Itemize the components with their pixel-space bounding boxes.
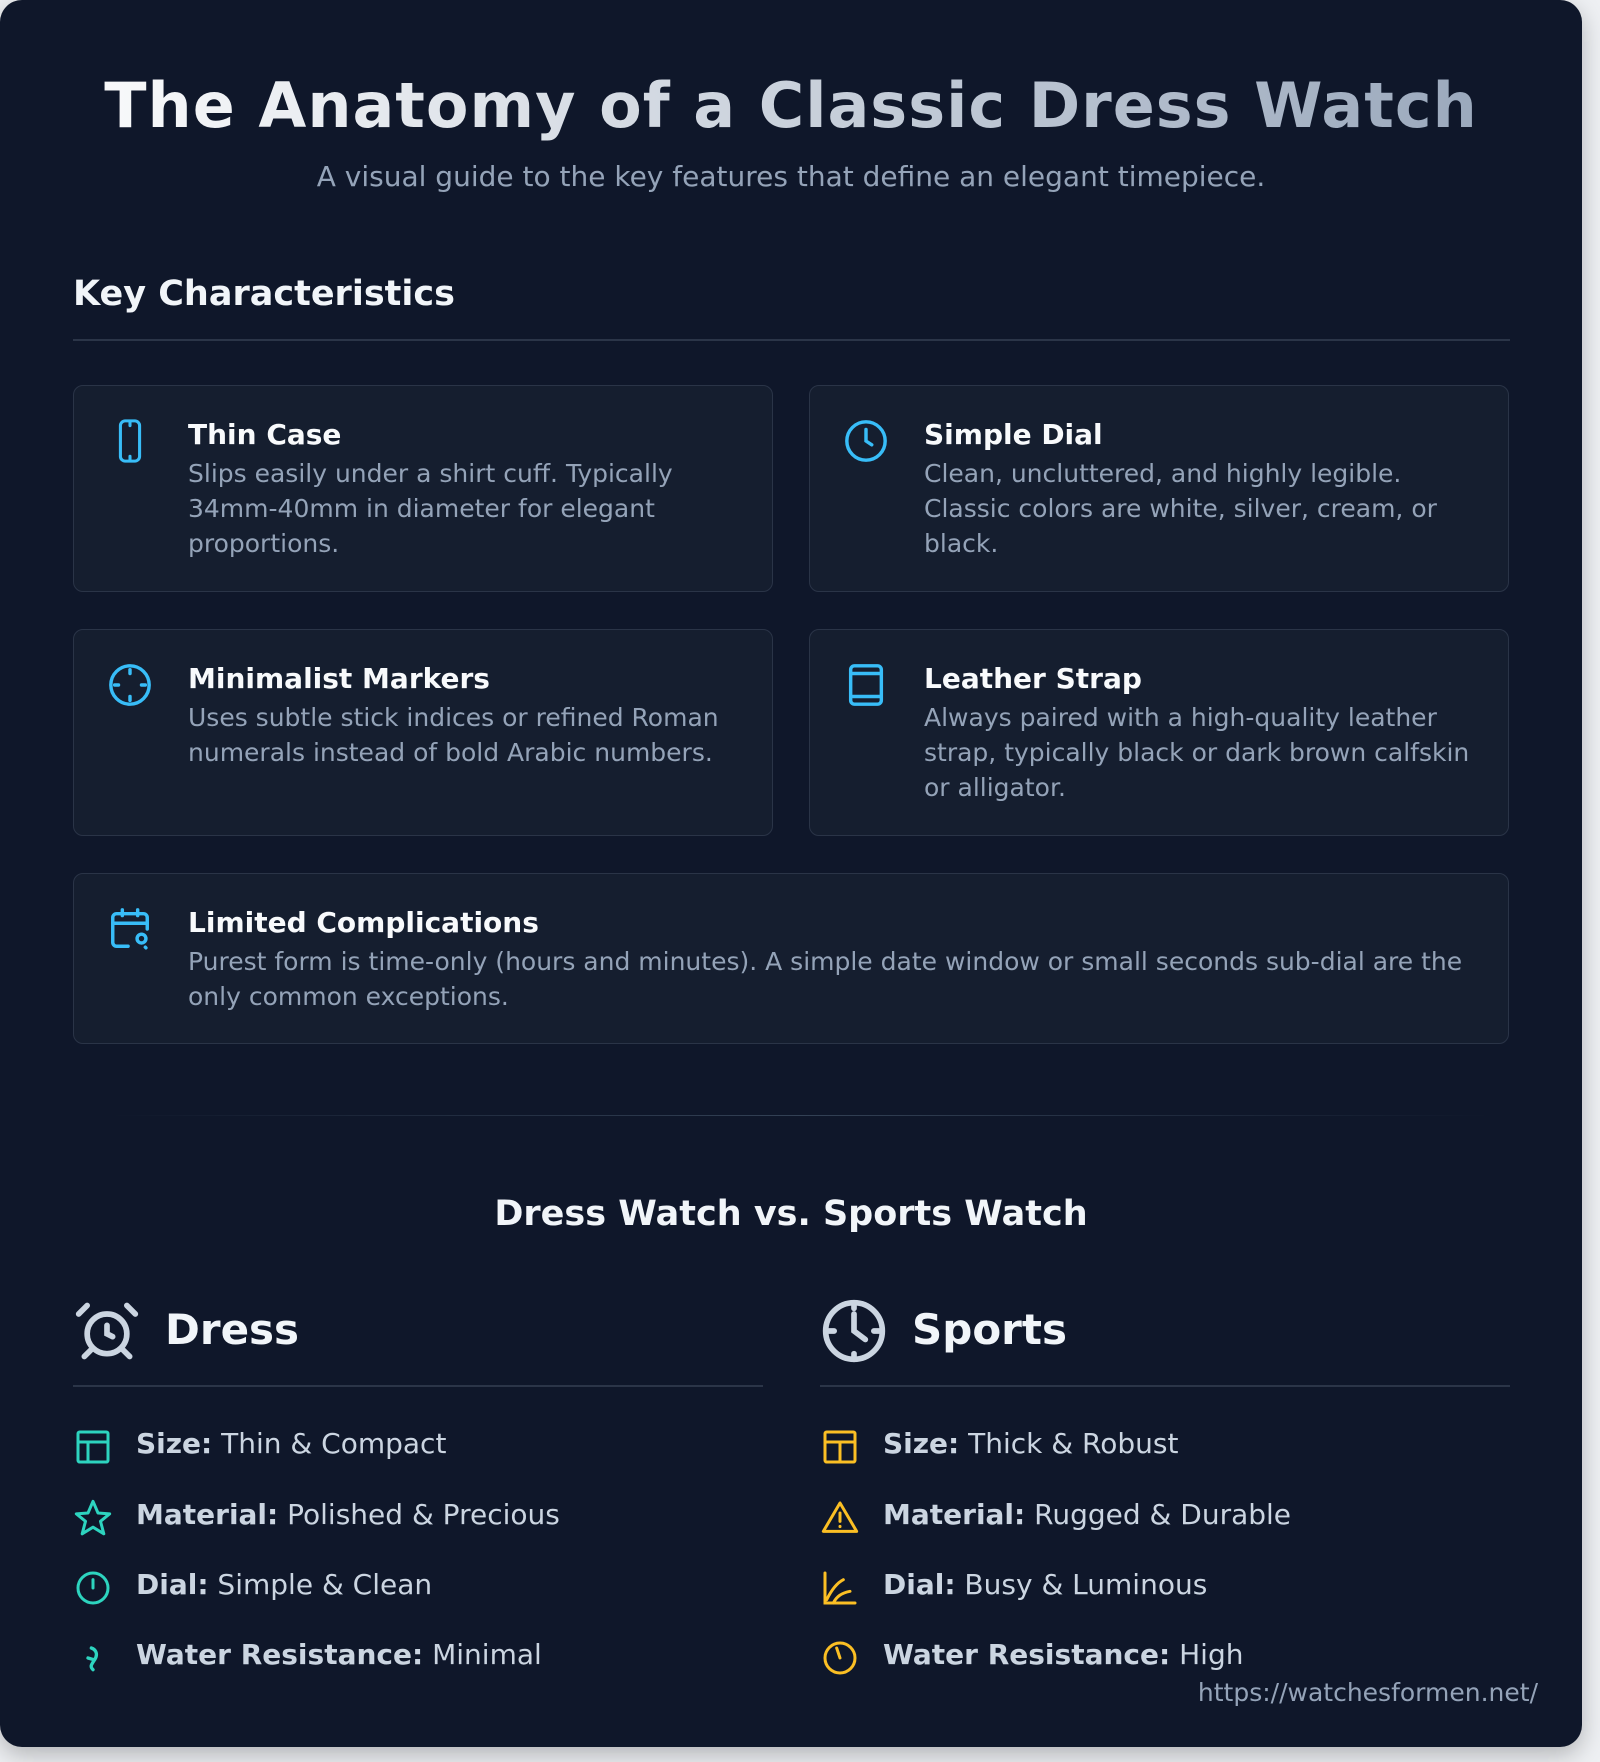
footer: source url: https://watchesformen.net/ [1198,1678,1538,1707]
list: dress features: Material: Polished & Precious [136,1498,560,1531]
list: sports features [822,1427,1291,1674]
icon: markers [109,664,151,706]
card: leather strap: Always paired with a high-quality leather strap, typically black or dark brown calfskin or alligator. [924,703,1469,802]
card: limited complications: Limited Complications [188,906,539,939]
text: minimalist markers [188,662,719,767]
item: material [74,1498,560,1536]
card: simple dial: Simple Dial [924,418,1103,451]
card: thin case: Slips easily under a shirt cuff. Typically 34mm-40mm in diameter for elegant proportions. [188,459,673,558]
icon: alarm clock [76,1302,138,1360]
card: leather strap [809,629,1509,836]
item: material [822,1498,1291,1533]
heading: dress: Dress [165,1305,299,1354]
item: size [824,1427,1178,1464]
list: dress features [74,1427,560,1672]
card: leather strap: Leather Strap [924,662,1142,695]
text: leather strap [924,662,1469,802]
card: thin case: Thin Case [188,418,341,451]
icon: thin case [118,419,142,463]
item: water resistance [824,1638,1243,1674]
heading: sports: Sports [912,1305,1067,1354]
list: dress features: Water Resistance: Minimal [136,1638,542,1671]
icon: calendar [111,908,149,950]
card: simple dial: Clean, uncluttered, and highly legible. Classic colors are white, silver, cream, or black. [924,459,1437,558]
card: minimalist markers: Uses subtle stick indices or refined Roman numerals instead of bold Arabic numbers. [188,703,719,767]
text: thin case [188,418,673,558]
item: dial [824,1568,1207,1605]
item: size [76,1427,446,1464]
list: sports features: Material: Rugged & Durable [883,1498,1291,1531]
card: limited complications: Purest form is time-only (hours and minutes). A simple date window or small seconds sub-dial are the only common exceptions. [188,947,1462,1011]
list: dress features: Size: Thin & Compact [136,1427,446,1460]
list: dress features: Dial: Simple & Clean [136,1568,432,1601]
card: minimalist markers: Minimalist Markers [188,662,490,695]
column: dress [73,1302,763,1672]
icon: clock [845,420,887,462]
list: sports features: Dial: Busy & Luminous [883,1568,1207,1601]
list: sports features: Size: Thick & Robust [883,1427,1178,1460]
card: simple dial [809,385,1509,592]
item: water resistance [86,1638,542,1672]
card: thin case [73,385,773,592]
icon: sports watch [822,1300,886,1362]
column: sports [820,1300,1510,1674]
item: dial [76,1568,432,1604]
heading: comparison: Dress Watch vs. Sports Watch [494,1194,1088,1234]
subtitle: A visual guide to the key features that define an elegant timepiece. [317,160,1265,193]
heading: key characteristics: Key Characteristics [73,274,455,314]
list: sports features: Water Resistance: High [883,1638,1243,1671]
card: minimalist markers [73,629,773,836]
card: limited complications [73,873,1509,1044]
text: simple dial [924,418,1437,558]
text: limited complications [188,906,1462,1011]
title: The Anatomy of a Classic Dress Watch [104,69,1478,142]
icon: strap [848,664,884,706]
